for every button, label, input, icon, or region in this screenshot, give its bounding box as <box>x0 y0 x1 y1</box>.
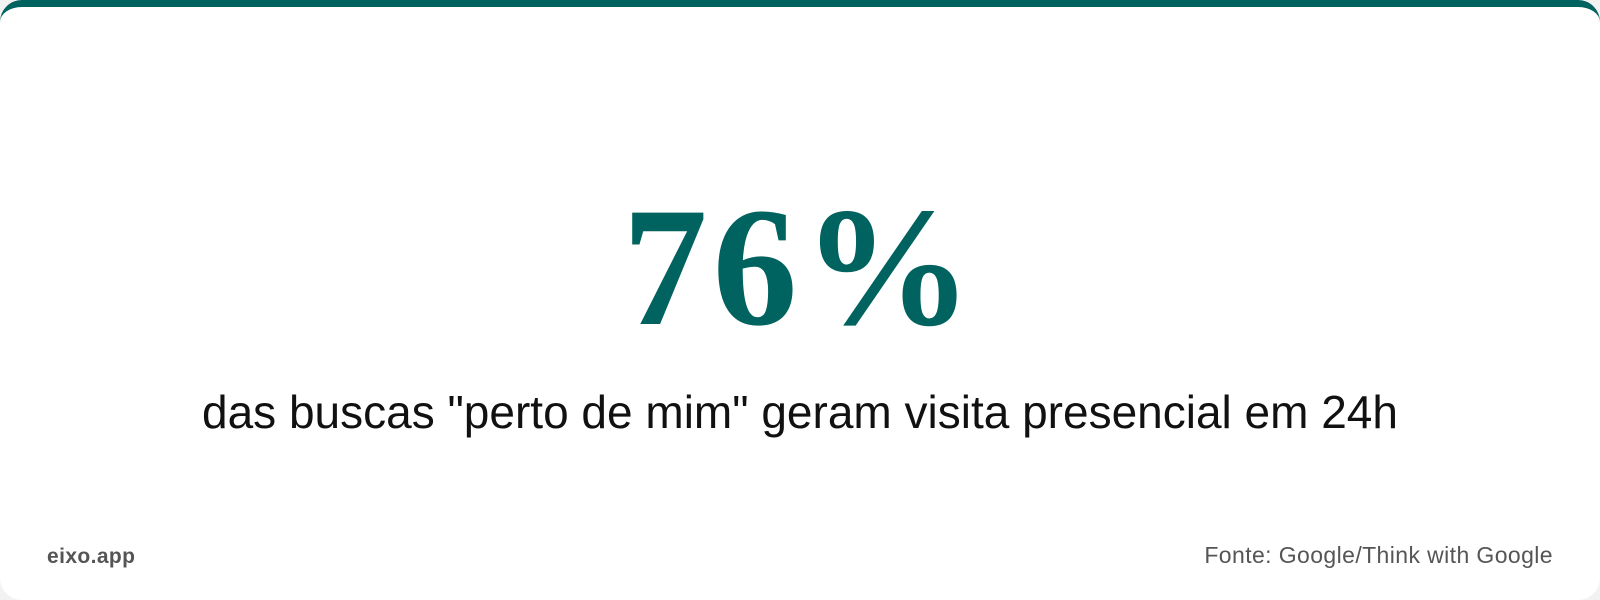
headline number: 76% <box>622 173 978 361</box>
source: Fonte: Google/Think with Google <box>1204 542 1553 568</box>
brand: eixo.app <box>47 545 135 568</box>
subtitle: das buscas "perto de mim" geram visita presencial em 24h <box>202 386 1398 438</box>
